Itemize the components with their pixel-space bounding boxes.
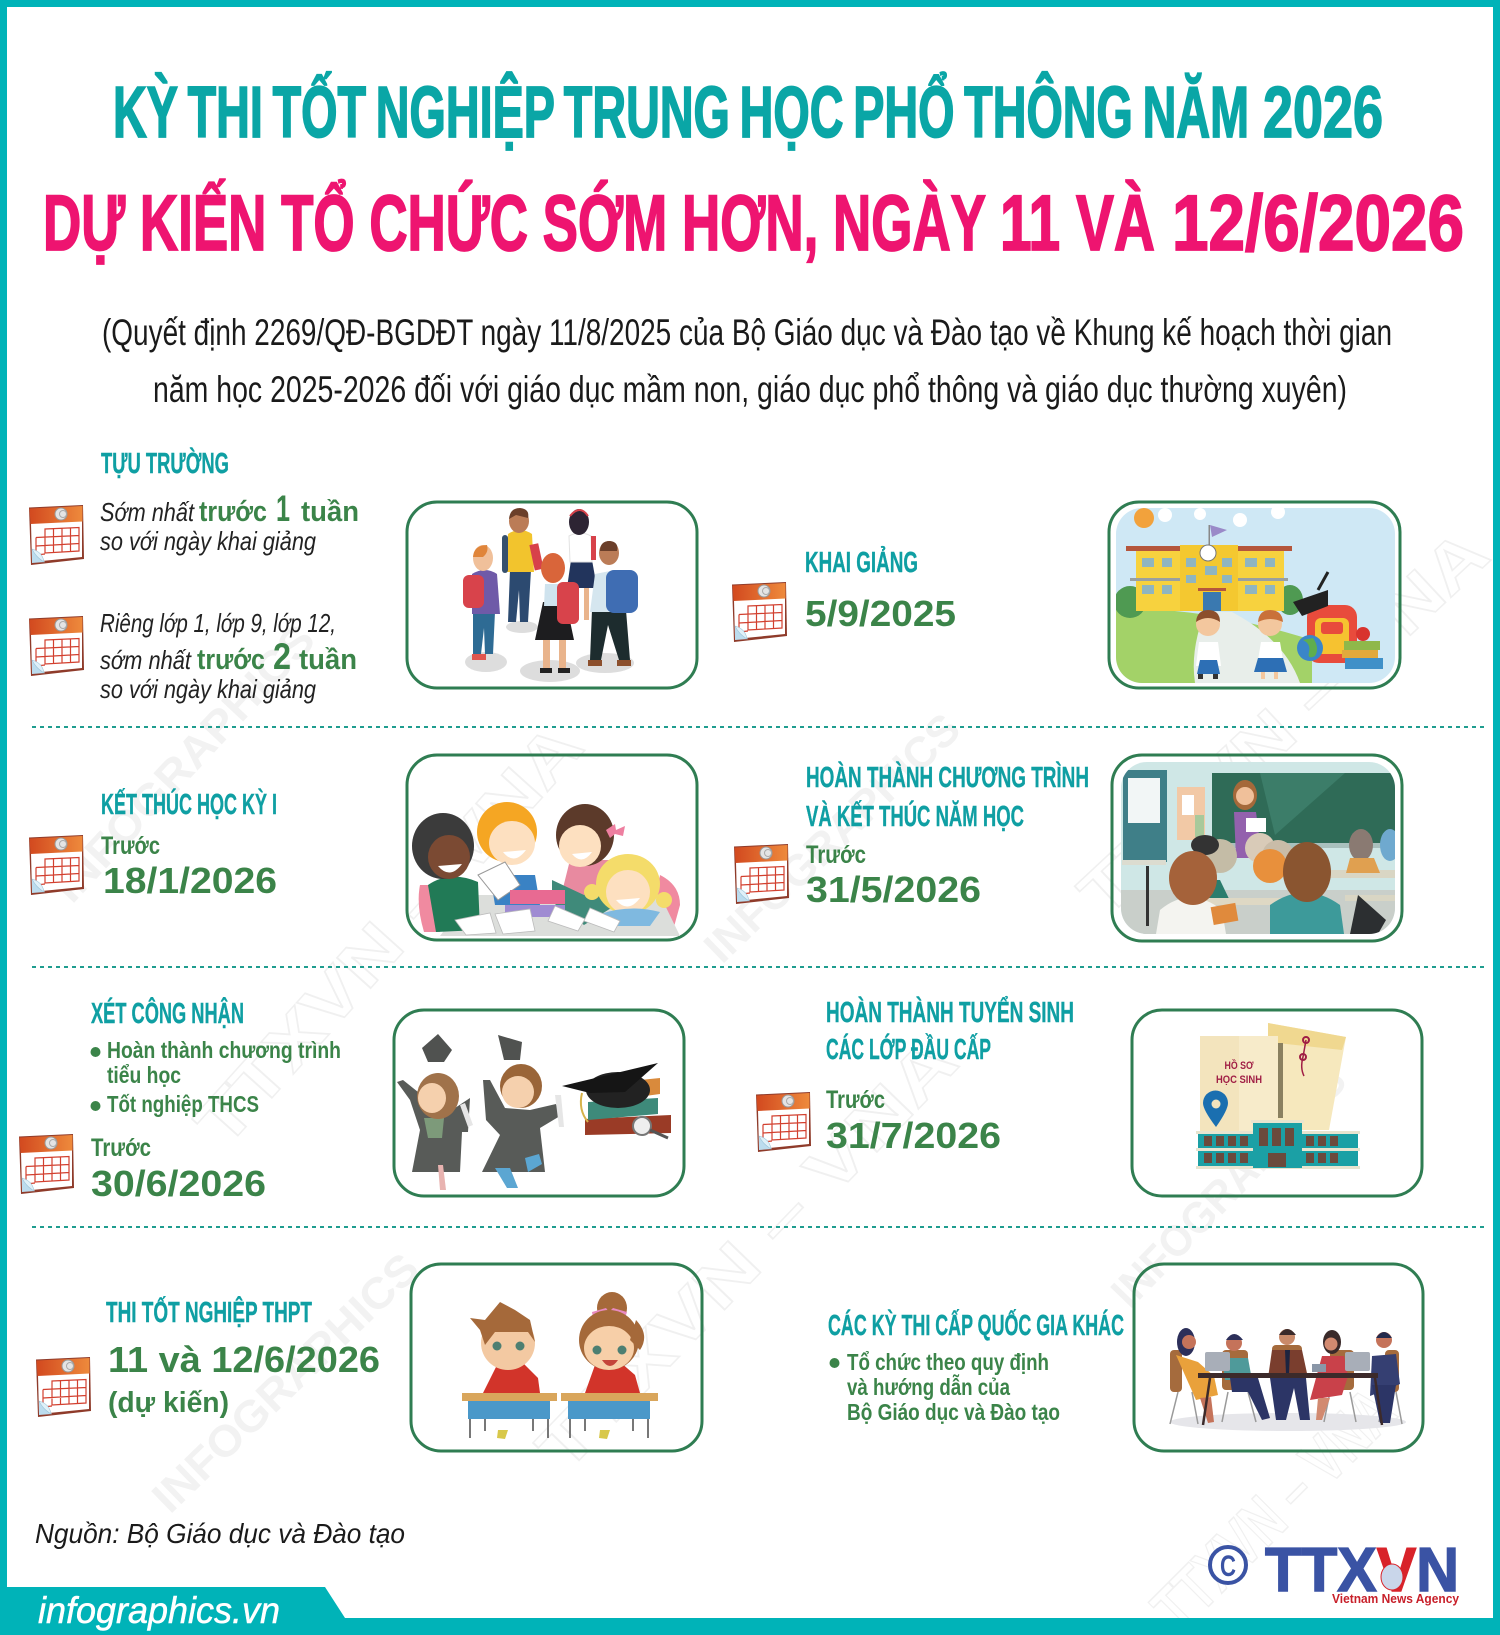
heading: tựu trường: TỰU TRƯỜNG bbox=[101, 446, 229, 480]
date: 11 và 12/6/2026: 11 và 12/6/2026 bbox=[108, 1339, 380, 1380]
bullet text: Tổ chức theo quy định bbox=[847, 1349, 1049, 1375]
date: 30/6/2026: 30/6/2026 bbox=[91, 1163, 266, 1204]
panel: student records illustration: HỌC SINH bbox=[1216, 1074, 1262, 1086]
icon: calendar bbox=[29, 835, 84, 895]
icon: calendar bbox=[756, 1092, 811, 1152]
text: sớm nhất trước 1 tuần: tuần bbox=[301, 496, 359, 528]
panel: children reading illustration bbox=[407, 755, 697, 940]
panel: classroom illustration bbox=[1112, 755, 1402, 941]
panel: school illustration bbox=[1109, 502, 1400, 688]
bullets bbox=[90, 1037, 341, 1117]
watermarks: TTXVN – VNA bbox=[522, 1023, 971, 1485]
dotted separators bbox=[32, 727, 1484, 1227]
heading: hoàn thành chương trình và kết thúc năm học bbox=[806, 760, 1089, 833]
panel: meeting illustration bbox=[1134, 1264, 1423, 1451]
text: riêng lớp 1, 9, 12 bbox=[100, 608, 357, 704]
bullet text: và hướng dẫn của bbox=[847, 1373, 1010, 1400]
watermarks: TTXVN – VNA bbox=[1064, 515, 1500, 930]
watermarks: INFOGRAPHICS bbox=[143, 1244, 429, 1522]
text: sớm nhất trước 1 tuần bbox=[100, 488, 359, 556]
section: khai giảng bbox=[732, 545, 956, 642]
subtitle bbox=[102, 312, 1392, 410]
icon: calendar bbox=[29, 505, 84, 565]
text: riêng lớp 1, 9, 12: so với ngày khai giảng bbox=[100, 674, 316, 704]
section: tựu trường bbox=[29, 446, 359, 704]
note: dự kiến: (dự kiến) bbox=[108, 1387, 229, 1419]
date: 18/1/2026: 18/1/2026 bbox=[103, 860, 277, 901]
icon: calendar bbox=[734, 844, 789, 904]
icon: calendar bbox=[19, 1134, 74, 1194]
heading: hoàn thành tuyển sinh các lớp đầu cấp: CÁC LỚP ĐẦU CẤP bbox=[826, 1032, 991, 1066]
bullet text: Bộ Giáo dục và Đào tạo bbox=[847, 1399, 1060, 1425]
panel: graduates illustration bbox=[394, 1010, 684, 1196]
section: thi tốt nghiệp THPT bbox=[36, 1295, 380, 1419]
label: trước: Trước bbox=[826, 1086, 885, 1114]
heading: các kỳ thi cấp quốc gia khác: CÁC KỲ THI CẤP QUỐC GIA KHÁC bbox=[828, 1308, 1124, 1342]
text: riêng lớp 1, 9, 12: sớm nhất bbox=[100, 645, 192, 675]
title line 2: 11 VÀ bbox=[1000, 178, 1155, 267]
date: 31/7/2026: 31/7/2026 bbox=[826, 1115, 1001, 1156]
heading: khai giảng: KHAI GIẢNG bbox=[805, 545, 918, 579]
text: sớm nhất trước 1 tuần: so với ngày khai giảng bbox=[100, 526, 316, 556]
heading: kết thúc học kỳ I: KẾT THÚC HỌC KỲ I bbox=[101, 787, 277, 821]
text: riêng lớp 1, 9, 12: trước bbox=[197, 644, 265, 676]
icon: calendar bbox=[36, 1357, 91, 1417]
bullet text bbox=[830, 1349, 1060, 1425]
heading: thi tốt nghiệp THPT: THI TỐT NGHIỆP THPT bbox=[106, 1295, 312, 1329]
watermarks: TTXVN – VNA bbox=[180, 709, 597, 1159]
text: riêng lớp 1, 9, 12: Riêng lớp 1, lớp 9, lớp 12, bbox=[100, 608, 336, 638]
heading: xét công nhận: XÉT CÔNG NHẬN bbox=[91, 996, 244, 1030]
text: riêng lớp 1, 9, 12: tuần bbox=[299, 644, 357, 676]
date: 31/5/2026: 31/5/2026 bbox=[806, 869, 981, 910]
label: trước: Trước bbox=[101, 832, 160, 860]
text: sớm nhất trước 1 tuần: 1 bbox=[276, 488, 290, 529]
bullets: tiểu học bbox=[107, 1062, 181, 1088]
logo: TTXVN: TTXVN bbox=[1265, 1536, 1459, 1605]
section: xét công nhận bbox=[19, 996, 341, 1204]
watermarks bbox=[43, 515, 1500, 1635]
heading: hoàn thành tuyển sinh các lớp đầu cấp bbox=[826, 995, 1074, 1066]
source note: Nguồn: Bộ Giáo dục và Đào tạo bbox=[35, 1518, 405, 1549]
section: hoàn thành tuyển sinh bbox=[756, 995, 1074, 1156]
label: trước: Trước bbox=[806, 841, 866, 869]
footer band bbox=[0, 1587, 1500, 1635]
label: trước: Trước bbox=[91, 1134, 151, 1162]
panel: student records illustration: HỒ SƠ bbox=[1224, 1059, 1254, 1072]
footer site name: infographics.vn bbox=[38, 1590, 280, 1631]
bullets: Hoàn thành chương trình bbox=[107, 1037, 341, 1063]
section: kết thúc học kỳ I bbox=[29, 787, 277, 901]
text: sớm nhất trước 1 tuần: Sớm nhất bbox=[100, 497, 195, 527]
panel: students illustration bbox=[407, 502, 697, 688]
panel: exam students illustration bbox=[411, 1264, 702, 1451]
section: hoàn thành chương trình bbox=[734, 760, 1089, 910]
heading: hoàn thành tuyển sinh các lớp đầu cấp: HOÀN THÀNH TUYỂN SINH bbox=[826, 995, 1074, 1029]
watermarks: INFOGRAPHICS bbox=[43, 615, 325, 912]
icon: calendar bbox=[29, 616, 84, 676]
text: sớm nhất trước 1 tuần: trước bbox=[199, 496, 267, 528]
bullets: Tốt nghiệp THCS bbox=[107, 1091, 259, 1117]
panel: student records illustration bbox=[1132, 1010, 1422, 1196]
heading: hoàn thành chương trình và kết thúc năm học: HOÀN THÀNH CHƯƠNG TRÌNH bbox=[806, 760, 1089, 794]
text: riêng lớp 1, 9, 12: 2 bbox=[273, 636, 291, 677]
logo: TTXVN: Vietnam News Agency bbox=[1332, 1591, 1460, 1606]
heading: hoàn thành chương trình và kết thúc năm học: VÀ KẾT THÚC NĂM HỌC bbox=[806, 799, 1024, 833]
watermarks: TTXVN – VNA bbox=[1138, 1373, 1409, 1635]
title line 1: 2026 bbox=[1263, 73, 1383, 153]
title line 2: DỰ KIẾN TỔ CHỨC SỚM HƠN, NGÀY bbox=[43, 178, 986, 267]
icon: calendar bbox=[732, 582, 787, 642]
date: 5/9/2025: 5/9/2025 bbox=[805, 593, 956, 634]
watermarks: INFOGRAPHICS bbox=[1102, 1056, 1356, 1317]
logo: TTXVN: C bbox=[1220, 1550, 1236, 1583]
watermarks: INFOGRAPHICS bbox=[695, 704, 970, 972]
section: các kỳ thi cấp quốc gia khác bbox=[828, 1308, 1124, 1425]
